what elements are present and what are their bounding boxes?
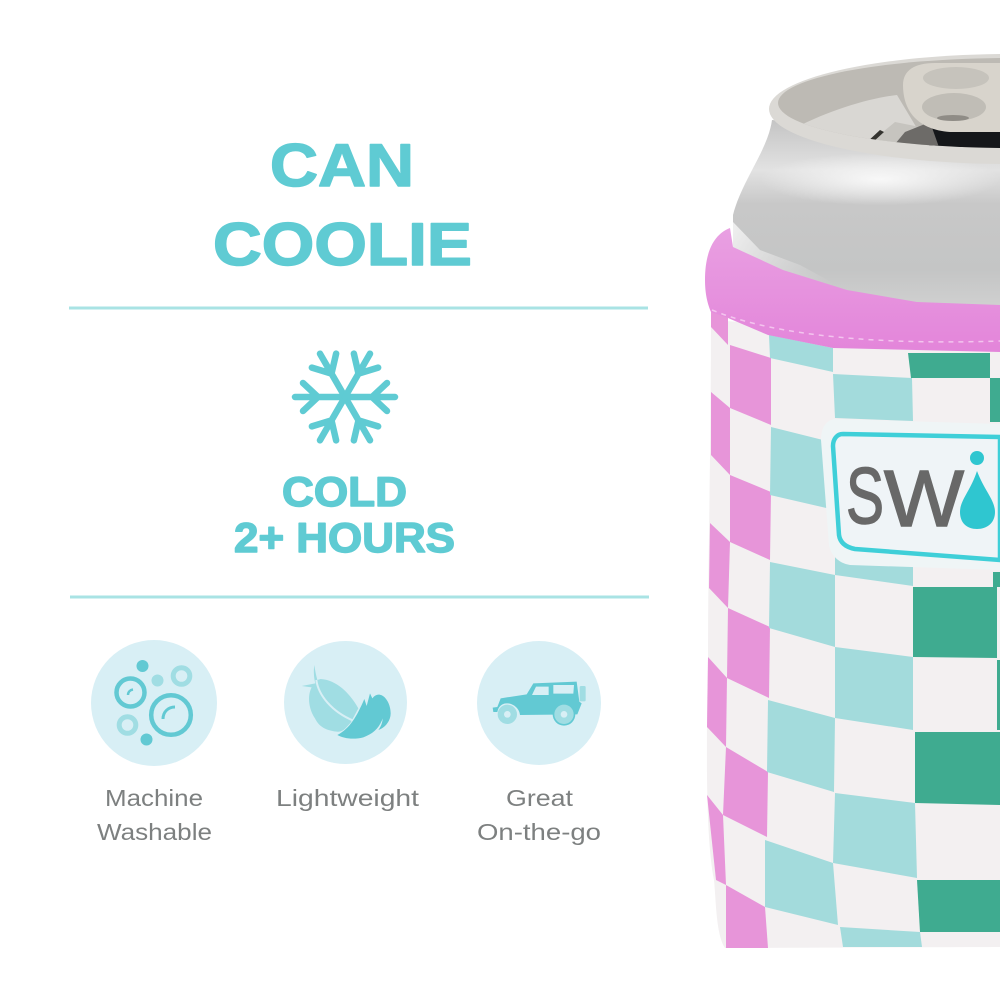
checker pattern bbox=[707, 300, 1000, 948]
cold duration text: 2+ HOURS bbox=[234, 514, 455, 561]
can body bbox=[733, 120, 1000, 320]
rubber logo patch: S bbox=[846, 451, 884, 540]
cold duration text bbox=[234, 468, 455, 561]
feature: machine washable: Washable bbox=[97, 819, 212, 845]
coolie fabric bbox=[707, 320, 1000, 948]
pink collar bbox=[705, 228, 1000, 352]
feature: great on-the-go: On-the-go bbox=[477, 819, 601, 845]
feature: lightweight: Lightweight bbox=[276, 785, 420, 811]
feature: lightweight bbox=[276, 641, 420, 811]
icon: bubbles bbox=[91, 640, 217, 766]
title: CAN bbox=[270, 132, 414, 199]
icon: snowflake bbox=[295, 347, 395, 447]
feature: machine washable bbox=[91, 640, 217, 845]
feature: great on-the-go: Great bbox=[506, 785, 574, 811]
rubber logo patch: W bbox=[884, 454, 965, 543]
can rim and lid bbox=[769, 54, 1000, 164]
cold duration text: COLD bbox=[282, 468, 407, 515]
title bbox=[213, 132, 472, 278]
icon: jeep bbox=[477, 641, 601, 765]
feature: machine washable: Machine bbox=[105, 785, 203, 811]
icon: feather bbox=[284, 641, 407, 764]
feature: great on-the-go bbox=[477, 641, 601, 845]
product photo: can in coolie bbox=[705, 54, 1000, 948]
title: COOLIE bbox=[213, 211, 472, 278]
rubber logo patch bbox=[821, 419, 1000, 570]
